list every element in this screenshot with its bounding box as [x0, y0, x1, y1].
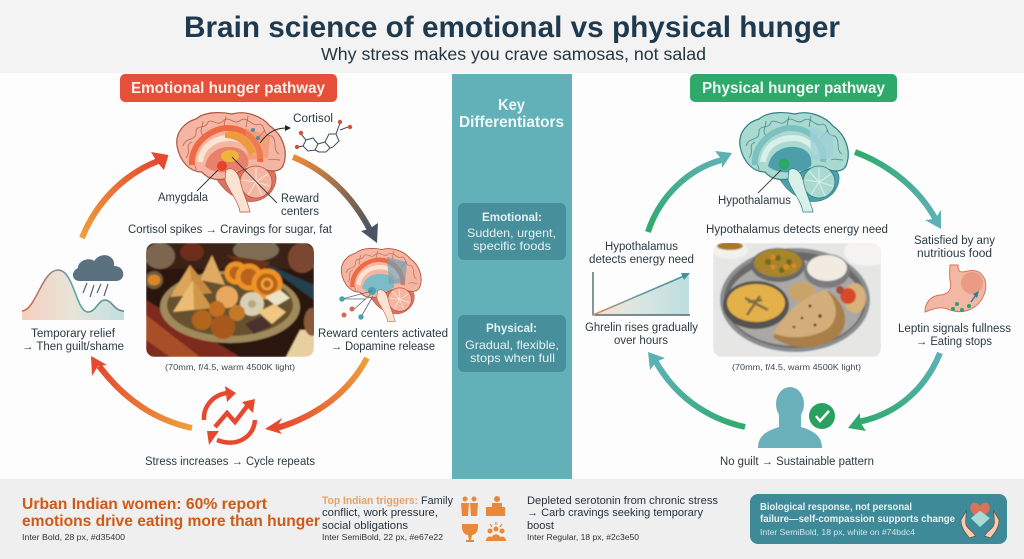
- card: physical: [458, 315, 566, 372]
- icon: desk worker: [486, 496, 505, 516]
- callout: biological response: Biological response, not personal: [760, 502, 912, 513]
- panel: emotional hunger pathway: [22, 74, 448, 468]
- icon: stress cycle: [204, 386, 255, 445]
- text: top Indian triggers: Family: [421, 495, 453, 507]
- text: depleted serotonin: boost: [527, 520, 554, 532]
- brain: hypothalamus: [740, 113, 848, 212]
- stat: urban Indian women: Inter Bold, 28 px, #d35400: [22, 533, 126, 542]
- brain: amygdala and reward centers: [177, 113, 291, 212]
- text: top Indian triggers: Top Indian triggers:: [322, 495, 418, 507]
- card: emotional: Emotional:: [482, 210, 542, 224]
- arrow: brain to satisfied: [855, 152, 941, 229]
- subtitle: Why stress makes you crave samosas, not salad: [321, 44, 706, 64]
- caption: reward centers activated: Reward centers activated: [318, 328, 448, 340]
- caption: reward centers activated: [318, 328, 448, 353]
- card: physical: stops when full: [470, 351, 555, 365]
- icon: cortisol molecule: [295, 120, 352, 152]
- chart: ghrelin rising: [593, 272, 690, 315]
- caption: reward centers activated: → Dopamine release: [331, 341, 435, 353]
- icon: person with check: [758, 387, 835, 448]
- arrow: reward to stress: [265, 358, 367, 434]
- text: top Indian triggers: [322, 495, 453, 542]
- photo: emotional comfort food platter: [145, 239, 320, 357]
- caption: photo settings: (70mm, f/4.5, warm 4500K light): [732, 362, 861, 372]
- caption: photo settings: (70mm, f/4.5, warm 4500K light): [165, 362, 295, 372]
- label: reward centers: centers: [281, 206, 319, 218]
- caption: leptin signals: [898, 323, 1011, 348]
- caption: temporary relief: [22, 328, 124, 353]
- card: emotional: [458, 203, 566, 260]
- heading: key differentiators: Differentiators: [459, 114, 564, 131]
- caption: leptin signals: Leptin signals fullness: [898, 323, 1011, 335]
- caption: hypothalamus detects, left: Hypothalamus: [605, 241, 678, 253]
- brain: reward centers activated: [339, 248, 421, 322]
- callout: biological response: Inter SemiBold, 18 px, white on #74bdc4: [760, 528, 916, 537]
- icon: family: [461, 496, 478, 516]
- caption: ghrelin rises: Ghrelin rises gradually: [585, 322, 698, 334]
- heading pill: physical: Physical hunger pathway: [702, 80, 885, 97]
- label: reward centers: Reward: [281, 193, 319, 205]
- arrow: stress to relief: [91, 356, 192, 428]
- text: top Indian triggers: social obligations: [322, 520, 409, 532]
- icon: rain cloud: [73, 255, 123, 297]
- heading: key differentiators: Key: [498, 97, 525, 114]
- label: hypothalamus: Hypothalamus: [718, 195, 791, 207]
- card: physical: Physical:: [486, 321, 537, 335]
- panel: physical hunger pathway: [585, 74, 1011, 468]
- header band: [0, 0, 1024, 73]
- callout: biological response: failure—self-compassion supports change: [760, 514, 955, 525]
- text: depleted serotonin: [527, 495, 718, 542]
- caption: temporary relief: → Then guilt/shame: [22, 341, 124, 353]
- card: emotional: Sudden, urgent,: [467, 226, 556, 240]
- arrow: brain to reward centers: [293, 157, 378, 243]
- icon: stomach: [925, 265, 986, 312]
- arrow: leptin to pattern: [848, 353, 940, 431]
- icon: hands holding heart: [961, 502, 999, 538]
- panel: footer band: [0, 479, 1024, 559]
- stat: urban Indian women: Urban Indian women: 60% report: [22, 496, 267, 513]
- caption: cortisol spikes: Cortisol spikes → Cravings for sugar, fat: [128, 224, 333, 236]
- caption: leptin signals: → Eating stops: [916, 336, 992, 348]
- heading pill: emotional: [120, 74, 337, 102]
- heading pill: emotional: Emotional hunger pathway: [131, 80, 325, 97]
- icon: trophy: [462, 524, 478, 542]
- arrow: relief to brain: [82, 152, 168, 238]
- caption: hypothalamus detects energy need: Hypothalamus detects energy need: [706, 224, 888, 236]
- text: depleted serotonin: Depleted serotonin from chronic stress: [527, 495, 718, 507]
- caption: satisfied: Satisfied by any: [914, 235, 995, 247]
- caption: temporary relief: Temporary relief: [31, 328, 116, 340]
- callout: biological response: [750, 494, 1007, 544]
- stat: urban Indian women: emotions drive eating more than hunger: [22, 513, 320, 530]
- caption: satisfied: nutritious food: [917, 248, 992, 260]
- heading pill: physical: [690, 74, 897, 102]
- chart: relief then guilt curve: [22, 270, 124, 320]
- title: Brain science of emotional vs physical hunger: [184, 11, 840, 44]
- photo: balanced thali: [713, 243, 881, 357]
- panel: key differentiators: [452, 74, 572, 479]
- text: depleted serotonin: → Carb cravings seeking temporary: [527, 507, 703, 519]
- text: top Indian triggers: conflict, work pressure,: [322, 507, 438, 519]
- caption: stress increases: Stress increases → Cycle repeats: [145, 456, 315, 468]
- label: cortisol: Cortisol: [293, 113, 333, 125]
- label: amygdala: Amygdala: [158, 192, 209, 204]
- stat: urban Indian women: [22, 496, 320, 542]
- icons: triggers: [461, 496, 506, 542]
- icon: group: [486, 522, 506, 541]
- caption: ghrelin rises: [585, 322, 698, 347]
- label: reward centers: [281, 193, 319, 218]
- caption: hypothalamus detects, left: [589, 241, 694, 266]
- card: emotional: specific foods: [473, 239, 551, 253]
- text: depleted serotonin: Inter Regular, 18 px, #2c3e50: [527, 533, 640, 542]
- card: physical: Gradual, flexible,: [465, 338, 559, 352]
- caption: hypothalamus detects, left: detects energy need: [589, 254, 694, 266]
- caption: no guilt: No guilt → Sustainable pattern: [720, 456, 874, 468]
- text: top Indian triggers: Inter SemiBold, 22 px, #e67e22: [322, 533, 444, 542]
- arrow: pattern to ghrelin: [648, 352, 745, 427]
- heading: key differentiators: [459, 97, 564, 131]
- arrow: ghrelin to brain: [648, 151, 732, 232]
- caption: satisfied: [914, 235, 995, 260]
- caption: ghrelin rises: over hours: [614, 335, 668, 347]
